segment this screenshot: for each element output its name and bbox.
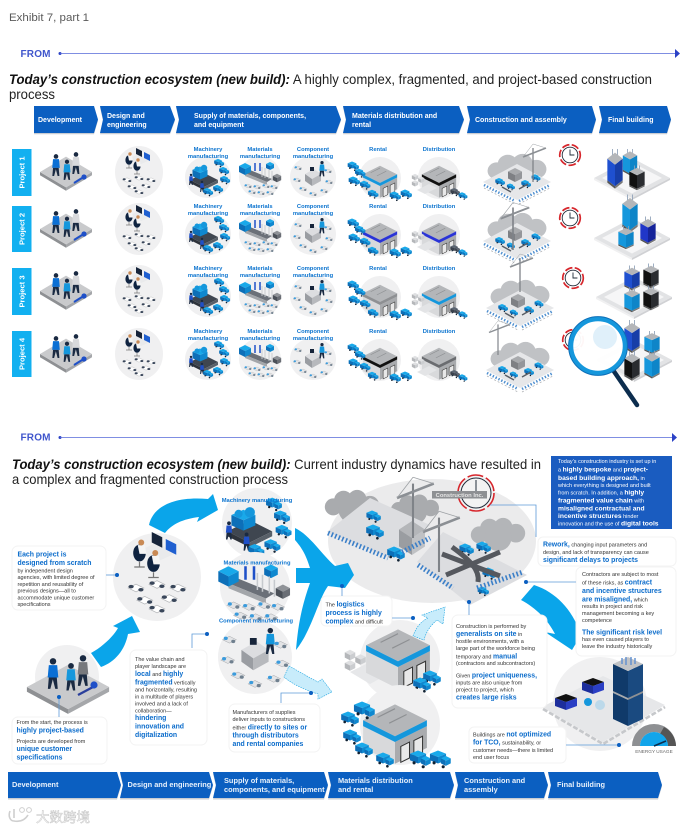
- callout: design from scratch: [12, 546, 119, 610]
- row: project 2: Materials: [247, 204, 273, 210]
- callout: value chain: in a multitude of players: [135, 694, 193, 700]
- illustration: machinery manufacturing: [222, 488, 293, 558]
- callout: contractors risk: results in project and risk: [582, 604, 643, 610]
- row: project 1: Project 1: [18, 156, 26, 189]
- watermark: 大数跨境: [36, 806, 90, 826]
- value chain chevrons: top: Design and: [107, 113, 145, 120]
- callout: suppliers: Manufacturers of supplies: [232, 710, 296, 716]
- arrow: dashed to distribution: [284, 666, 332, 699]
- callout: suppliers: either directly to sites or: [232, 724, 307, 732]
- callout: navy summary box: incentive structures hinder: [558, 513, 639, 520]
- row: project 2: [12, 194, 670, 263]
- icon: energy usage gauge: ENERGY USAGE: [635, 749, 673, 754]
- callout: construction workforce: [452, 600, 547, 708]
- callout: contractors risk: and incentive structures: [582, 588, 662, 595]
- callout: value chain: collaboration—: [135, 708, 172, 714]
- callout: logistics: The logistics: [326, 602, 365, 608]
- row: project 3: Machinery: [194, 266, 223, 272]
- title: top panel: Today’s construction ecosystem (new build): A highly complex, fragmented, and project-based construction: [9, 71, 652, 87]
- value chain chevrons: bottom: Design and engineering: [128, 780, 212, 789]
- value chain chevrons: top: [34, 106, 671, 134]
- row: project 2: Machinery: [194, 204, 223, 210]
- row: project 2: manufacturing: [240, 211, 281, 217]
- callout: logistics: [321, 584, 415, 626]
- row: project 4: Project 4: [18, 337, 26, 370]
- row: project 1: manufacturing: [240, 154, 281, 160]
- row: project 3: manufacturing: [293, 273, 334, 279]
- row: project 4: [12, 320, 672, 392]
- row: project 3: Materials: [247, 266, 273, 272]
- callout: value chain: digitalization: [135, 732, 177, 739]
- callout: suppliers: through distributors: [232, 732, 299, 740]
- callout: navy summary box: [551, 456, 672, 529]
- callout: navy summary box: fragmented value chain with: [558, 498, 644, 504]
- value chain chevrons: top: and equipment: [194, 122, 244, 129]
- title: bottom panel: Today’s construction ecosystem (new build): Current industry dynamics have resulted in: [12, 456, 541, 472]
- row: project 1: Component: [297, 147, 329, 153]
- row: project 4: Materials: [247, 329, 273, 335]
- value chain chevrons: bottom: Development: [12, 780, 59, 789]
- from timeline arrow: bottom: [20, 432, 677, 444]
- title: bottom panel: a complex and fragmented construction process: [12, 471, 288, 487]
- callout: construction workforce: project to project, which: [456, 688, 514, 694]
- row: project 2: Rental: [369, 204, 387, 210]
- callout: construction workforce: Given project uniqueness,: [456, 672, 537, 680]
- arrow: site to final building: [521, 585, 584, 650]
- row: project 1: Materials: [247, 147, 273, 153]
- value chain chevrons: top: Construction and assembly: [475, 117, 567, 124]
- value chain chevrons: bottom: [8, 772, 662, 800]
- callout: navy summary box: from scratch. In addition, a highly: [558, 490, 644, 496]
- watermark: [9, 806, 90, 826]
- value chain chevrons: bottom: Final building: [557, 780, 606, 789]
- arrow: dashed to site: [413, 607, 445, 640]
- callout: rework: design, and lack of transparency can cause: [543, 550, 649, 556]
- callout: value chain: innovation and: [135, 724, 184, 730]
- callout: construction workforce: inputs are also unique from: [456, 680, 523, 686]
- callout: logistics: complex and difficult: [326, 618, 383, 626]
- exhibit label: Exhibit 7, part 1: [9, 12, 89, 24]
- row: project 1: [12, 144, 670, 204]
- callout: contractors risk: has even caused players to: [582, 637, 649, 643]
- row: project 1: Rental: [369, 147, 387, 153]
- callout: navy summary box: which everything is designed and built: [557, 483, 651, 489]
- callout: navy summary box: innovation and the use of digital tools: [558, 520, 659, 528]
- callout: logistics: process is highly: [326, 610, 382, 617]
- callout: value chain: player landscape are: [135, 664, 186, 670]
- callout: design from scratch: designed from scratch: [18, 560, 91, 567]
- callout: not optimized: end user focus: [473, 755, 509, 761]
- callout: construction workforce: creates large risks: [456, 694, 517, 702]
- callout: navy summary box: a highly bespoke and project-: [558, 466, 648, 474]
- row: project 3: [12, 254, 672, 330]
- callout: suppliers: and rental companies: [232, 741, 304, 748]
- row: project 4: manufacturing: [240, 336, 281, 342]
- from timeline arrow: top: FROM: [20, 49, 50, 60]
- row: project 3: Component: [297, 266, 329, 272]
- callout: rework: significant delays to projects: [543, 557, 638, 564]
- callout: contractors risk: The significant risk level: [582, 630, 662, 636]
- callout: not optimized: customer needs—there is limited: [473, 748, 553, 754]
- value chain chevrons: bottom: assembly: [464, 785, 499, 794]
- arrow: merging flow to site: [295, 528, 354, 650]
- callout: design from scratch: Each project is: [18, 552, 67, 558]
- row: project 2: Project 2: [18, 213, 26, 245]
- value chain chevrons: top: rental: [352, 122, 371, 129]
- row: project 2: Distribution: [423, 204, 456, 210]
- illustration: machinery manufacturing: Machinery manufacturing: [222, 498, 293, 504]
- row: project 2: manufacturing: [293, 211, 334, 217]
- callout: value chain: The value chain and: [135, 657, 185, 663]
- title: bottom panel: [12, 456, 541, 487]
- illustration: component manufacturing: [218, 618, 293, 694]
- illustration: construction site: [325, 477, 536, 605]
- callout: suppliers: deliver inputs to constructions: [232, 717, 305, 723]
- callout: project-based: specifications: [16, 754, 63, 762]
- icon: magnifying glass: [569, 317, 637, 405]
- value chain chevrons: top: Development: [38, 117, 83, 124]
- arrow: project to design: [91, 616, 140, 667]
- callout: construction workforce: (contractors and subcontractors): [456, 661, 535, 667]
- callout: value chain: fragmented vertically: [135, 680, 196, 686]
- callout: value chain: involved and a lack of: [135, 702, 188, 708]
- callout: project-based: highly project-based: [16, 728, 84, 734]
- illustration: component manufacturing: Component manufacturing: [219, 618, 293, 624]
- from timeline arrow: top: [20, 49, 680, 60]
- callout: navy summary box: Today’s construction industry is set up in: [558, 459, 656, 465]
- illustration: final building: [542, 657, 665, 751]
- row: project 4: Distribution: [423, 329, 456, 335]
- callout: not optimized: Buildings are not optimized: [473, 732, 551, 738]
- arrow: design to machinery: [149, 494, 218, 533]
- callout: contractors risk: leave the industry historically: [582, 644, 653, 650]
- callout: value chain: [130, 632, 209, 745]
- callout: project-based: From the start, the process is: [16, 720, 88, 726]
- value chain chevrons: top: Materials distribution and: [352, 113, 437, 120]
- callout: design from scratch: agencies, with limited degree of: [18, 575, 95, 581]
- callout: value chain: and horizontally, resulting: [135, 688, 197, 694]
- callout: contractors risk: are misaligned, which: [582, 596, 648, 604]
- row: project 1: manufacturing: [188, 154, 229, 160]
- callout: construction workforce: hostile environments, with a: [456, 639, 525, 645]
- title: top panel: [9, 71, 652, 102]
- callout: navy summary box: based building approach, in: [558, 475, 645, 482]
- illustration: materials manufacturing: Materials manufacturing: [223, 560, 291, 566]
- callout: rework: Rework, changing input parameters and: [543, 542, 647, 548]
- illustration: materials manufacturing: [218, 552, 291, 622]
- callout: construction workforce: temporary and manual: [456, 654, 517, 660]
- callout: contractors risk: management becoming a key: [582, 611, 654, 617]
- illustration: project platform: [27, 645, 109, 714]
- callout: project-based: [12, 695, 107, 764]
- callout: value chain: hindering: [135, 715, 166, 722]
- value chain chevrons: top: Supply of materials, components,: [194, 113, 306, 120]
- callout: construction workforce: generalists on site in: [456, 631, 522, 638]
- value chain chevrons: top: Final building: [608, 117, 654, 124]
- row: project 4: Machinery: [194, 329, 223, 335]
- callout: design from scratch: accommodate unique customer: [18, 595, 94, 601]
- row: project 4: manufacturing: [293, 336, 334, 342]
- row: project 3: manufacturing: [240, 273, 281, 279]
- illustration: warehouse distribution: [345, 620, 441, 700]
- icon: clock with construction inc: Construction Inc.: [436, 493, 484, 499]
- row: project 1: manufacturing: [293, 154, 334, 160]
- callout: navy summary box: misaligned contractual and: [558, 506, 645, 512]
- callout: design from scratch: by independent design: [18, 568, 73, 574]
- icon: clock with construction inc: [432, 475, 494, 511]
- row: project 3: Project 3: [18, 275, 26, 308]
- row: project 4: Component: [297, 329, 329, 335]
- row: project 4: manufacturing: [188, 336, 229, 342]
- callout: design from scratch: previous designs—all to: [18, 589, 76, 595]
- callout: design from scratch: specifications: [18, 602, 51, 608]
- callout: value chain: local and highly: [135, 671, 183, 678]
- illustration: design agency: [113, 532, 201, 621]
- callout: contractors risk: Contractors are subject to most: [582, 572, 659, 578]
- row: project 3: Distribution: [423, 266, 456, 272]
- callout: contractors risk: [524, 567, 676, 656]
- callout: contractors risk: competence: [582, 618, 612, 624]
- callout: construction workforce: large part of the workforce being: [456, 646, 535, 652]
- row: project 1: Distribution: [423, 147, 456, 153]
- from timeline arrow: bottom: FROM: [20, 432, 50, 444]
- value chain chevrons: bottom: components, and equipment: [224, 785, 325, 794]
- illustration: rental warehouse: [341, 685, 451, 768]
- row: project 3: manufacturing: [188, 273, 229, 279]
- callout: design from scratch: repetition and reusability of: [18, 582, 84, 588]
- row: project 2: manufacturing: [188, 211, 229, 217]
- row: project 4: Rental: [369, 329, 387, 335]
- value chain chevrons: top: engineering: [107, 122, 147, 129]
- value chain chevrons: bottom: Materials distribution: [338, 776, 413, 785]
- callout: not optimized: [469, 727, 621, 763]
- callout: project-based: Projects are developed from: [16, 739, 86, 745]
- title: top panel: process: [9, 86, 55, 102]
- callout: construction workforce: Construction is performed by: [456, 624, 527, 630]
- value chain chevrons: bottom: and rental: [338, 785, 373, 794]
- callout: rework: [490, 505, 676, 566]
- icon: energy usage gauge: [632, 724, 676, 754]
- row: project 3: Rental: [369, 266, 387, 272]
- row: project 1: Machinery: [194, 147, 223, 153]
- value chain chevrons: bottom: Supply of materials,: [224, 776, 294, 785]
- callout: not optimized: for TCO, sustainability, or: [473, 740, 541, 746]
- callout: project-based: unique customer: [16, 746, 72, 753]
- value chain chevrons: bottom: Construction and: [464, 776, 526, 785]
- callout: contractors risk: of these risks, as contract: [582, 580, 653, 586]
- row: project 2: Component: [297, 204, 329, 210]
- callout: suppliers: [229, 691, 320, 752]
